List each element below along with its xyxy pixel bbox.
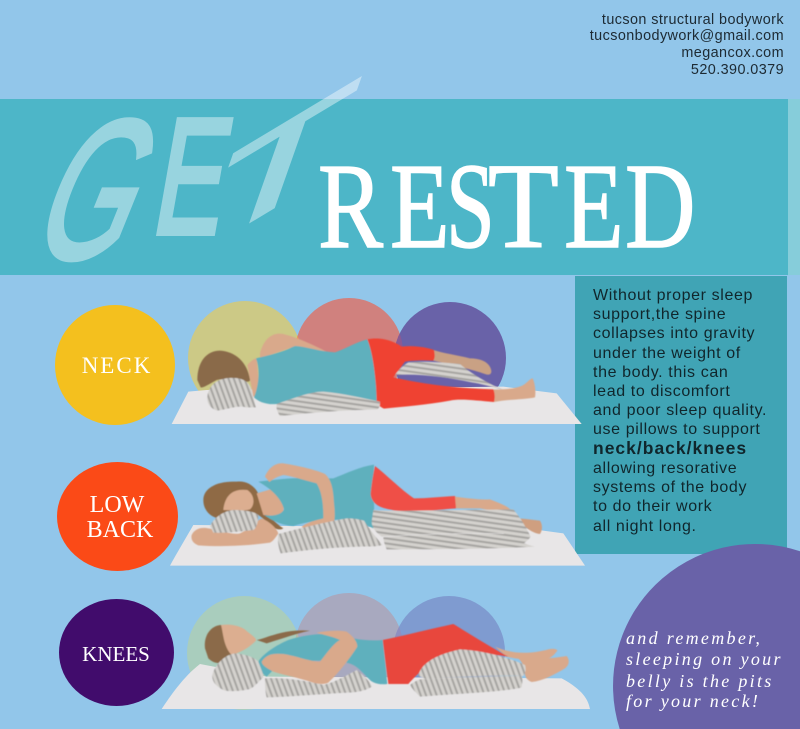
figure: neck support xyxy=(172,334,582,424)
text panel: sleep support: to do their work xyxy=(593,498,713,515)
mattress xyxy=(172,387,582,424)
text panel: sleep support: under the weight of xyxy=(593,345,741,362)
title: rested: E xyxy=(390,139,450,274)
upper arm xyxy=(265,463,335,528)
text panel: sleep support: lead to discomfort xyxy=(593,383,730,400)
text panel: sleep support: allowing resorative xyxy=(593,460,737,477)
badge: knees: KNEES xyxy=(82,642,150,666)
callout circle: belly sleeping: for your neck! xyxy=(626,691,760,711)
head pillow xyxy=(210,510,258,533)
tank top xyxy=(254,339,377,404)
callout circle: belly sleeping xyxy=(613,544,800,729)
text panel: sleep support: support,the spine xyxy=(593,306,726,323)
mattress xyxy=(170,525,585,566)
arm and hands xyxy=(262,631,357,684)
text panel: sleep support: Without proper sleep xyxy=(593,287,753,304)
knee pillow xyxy=(395,362,503,389)
text panel: sleep support: systems of the body xyxy=(593,479,747,496)
lower leg pillow xyxy=(383,534,535,549)
shoulder and arm xyxy=(260,334,327,358)
leggings xyxy=(367,338,495,409)
badge: neck xyxy=(55,305,175,425)
title: rested: D xyxy=(625,139,695,274)
text panel: sleep support: the body. this can xyxy=(593,364,728,381)
title: rested: R xyxy=(318,139,383,274)
badge: low back: LOW xyxy=(90,492,145,518)
title: get: G xyxy=(9,79,191,300)
neck xyxy=(247,358,260,397)
text panel: sleep support: all night long. xyxy=(593,518,697,535)
leggings xyxy=(383,624,508,684)
hair xyxy=(203,481,283,529)
figure: low back support xyxy=(170,463,585,566)
near foot xyxy=(518,656,569,682)
title: get: T xyxy=(185,46,374,285)
torso pillow xyxy=(278,518,382,553)
mattress xyxy=(162,664,590,709)
callout circle: belly sleeping: belly is the pits xyxy=(626,671,774,691)
contact details: megancox.com xyxy=(681,45,784,61)
lower arm xyxy=(191,518,278,546)
text panel: sleep support: and poor sleep quality. xyxy=(593,402,767,419)
far leg xyxy=(433,350,491,375)
color circles: row 3 xyxy=(187,593,505,710)
hair xyxy=(197,351,250,387)
badge: low back xyxy=(57,462,178,571)
tank top xyxy=(258,465,374,528)
title: rested xyxy=(318,138,695,274)
title: rested: T xyxy=(488,138,559,274)
far foot xyxy=(495,647,557,660)
head pillow xyxy=(212,653,263,691)
text panel: sleep support xyxy=(575,276,787,554)
face xyxy=(221,625,256,655)
lower knee pillow xyxy=(410,676,522,697)
title: rested: E xyxy=(564,139,624,274)
figure: knee support xyxy=(162,624,590,709)
title: get xyxy=(9,46,374,300)
face xyxy=(223,490,253,511)
text panel: sleep support: use pillows to support xyxy=(593,421,760,438)
hair xyxy=(205,625,232,663)
title banner xyxy=(0,99,800,275)
torso pillow xyxy=(276,392,380,416)
badge: neck: NECK xyxy=(82,353,152,378)
chest skin xyxy=(257,487,283,517)
contact details: 520.390.0379 xyxy=(691,62,784,78)
leggings xyxy=(371,466,456,512)
callout circle: belly sleeping: sleeping on your xyxy=(626,649,783,669)
near lower leg and foot xyxy=(493,378,535,402)
color circles: row 1 xyxy=(188,298,506,391)
upper knee pillow xyxy=(418,649,526,679)
torso pillow xyxy=(265,670,372,697)
contact details xyxy=(590,12,784,78)
badge: knees xyxy=(59,599,174,706)
contact details: tucsonbodywork@gmail.com xyxy=(590,28,784,44)
tank top xyxy=(258,634,387,684)
lower foot xyxy=(515,518,542,534)
braid xyxy=(257,630,310,643)
callout circle: belly sleeping: and remember, xyxy=(626,628,762,648)
text panel: sleep support: collapses into gravity xyxy=(593,325,755,342)
contact details: tucson structural bodywork xyxy=(602,12,784,28)
text panel: sleep support: neck/back/knees xyxy=(593,438,747,458)
badge: low back: BACK xyxy=(87,517,154,543)
title: rested: S xyxy=(446,138,495,273)
leg and foot xyxy=(455,497,512,516)
title: get: E xyxy=(144,86,244,269)
head pillow xyxy=(207,378,256,411)
upper leg pillow xyxy=(372,509,531,545)
